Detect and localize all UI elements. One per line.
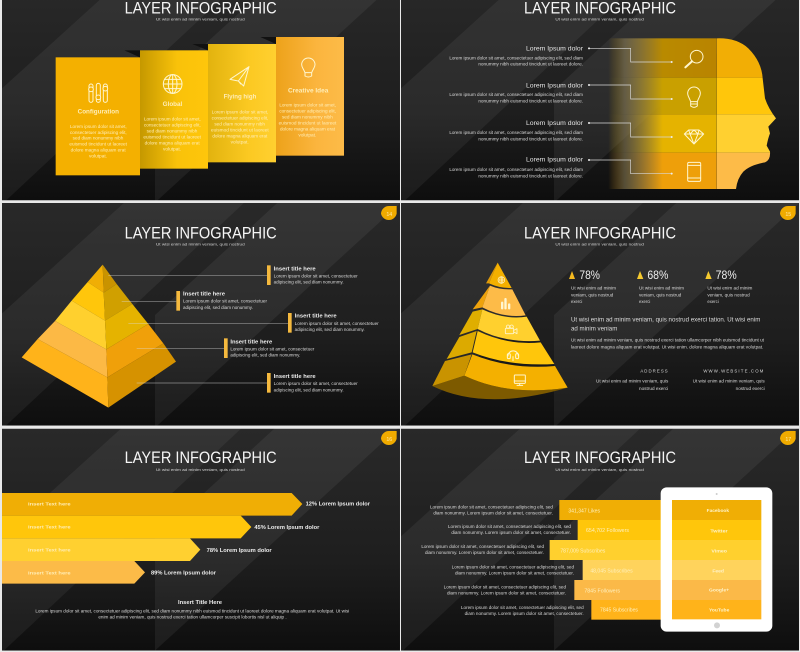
panel text: dolore magna aliquam erat bbox=[212, 133, 268, 138]
stat row: subscribes: diam nonummy. Lorem ipsum dolor sit amet, consectetuer. bbox=[425, 550, 544, 555]
curved layered pyramid bbox=[432, 263, 568, 399]
head graphic bbox=[608, 37, 780, 189]
stat 78%: Ut wisi enim ad minim bbox=[571, 285, 616, 290]
summary heading: ad minim veniam bbox=[571, 326, 617, 332]
website block: nostrud exerci bbox=[736, 386, 765, 391]
callout 1: Insert title here bbox=[274, 266, 316, 272]
tablet labels: Feed bbox=[712, 568, 724, 574]
address block bbox=[596, 368, 668, 391]
item 3: Lorem ipsum dolor sit amet, consectetuer adipiscing elit, sed diam bbox=[449, 130, 583, 135]
arrow bar 4 bbox=[2, 561, 217, 584]
slide 4 title: LAYER INFOGRAPHIC bbox=[524, 223, 676, 242]
panel text: dolore magna aliquam erat bbox=[145, 140, 200, 145]
panel heading: Configuration bbox=[78, 109, 119, 116]
slide 6 subtitle: Ut wisi enim ad minim veniam, quis nostrud bbox=[555, 467, 644, 472]
item 3: Lorem Ipsum dolor bbox=[526, 120, 583, 127]
summary body: laoreet dolore magna aliquam erat volutpat. Ut wisi enim. dolore magna aliquam erat volutpat. bbox=[571, 345, 763, 350]
icon: camera bbox=[505, 325, 517, 334]
icon: light bulb bbox=[302, 58, 315, 77]
arrow bar 2 bbox=[2, 516, 320, 538]
panel heading: Global bbox=[163, 101, 182, 108]
stat row: subscribes 3: diam nonummy. Lorem ipsum dolor sit amet, consectetuer. bbox=[465, 611, 584, 616]
stat row: followers bbox=[448, 520, 663, 540]
page badge 14: 14 bbox=[386, 212, 392, 218]
address block: ADDRESS bbox=[640, 368, 668, 373]
page badge 17: 17 bbox=[785, 437, 791, 443]
stat row: followers 2 bbox=[444, 580, 663, 600]
address block: nostrud exerci bbox=[639, 386, 668, 391]
arrow bar 4: 89% Lorem Ipsum dolor bbox=[151, 571, 217, 577]
icon: globe bbox=[163, 75, 182, 93]
stat 78% second: exerci bbox=[707, 299, 719, 304]
website block bbox=[693, 368, 765, 391]
footer text: Lorem ipsum dolor sit amet, consectetuer adipiscing elit, sed diam nonummy nibh euismod tincidunt ut laoreet dolore magna aliquam erat volutpat. Ut wisi bbox=[35, 608, 349, 613]
stat row: followers: Lorem ipsum dolor sit amet, consectetuer adipiscing elit, sed bbox=[448, 524, 572, 529]
item 3 bbox=[449, 120, 673, 141]
callout 4: adipiscing elit, sed diam nonummy. bbox=[230, 353, 300, 358]
panel text: consectetuer adipiscing elit, bbox=[279, 109, 336, 114]
summary heading: Ut wisi enim ad minim veniam, quis nostrud exerci tation. Ut wisi enim bbox=[571, 317, 760, 323]
arrow bar 3 bbox=[2, 538, 273, 561]
slide 6 background bbox=[401, 425, 800, 652]
item 2: Lorem ipsum dolor sit amet, consectetuer adipiscing elit, sed diam bbox=[449, 92, 583, 97]
panel text: volutpat. bbox=[231, 139, 249, 144]
panel text: Lorem ipsum dolor sit amet, bbox=[144, 117, 201, 122]
callout 3: Insert title here bbox=[295, 314, 337, 320]
stat row: likes bbox=[430, 500, 663, 520]
stat 78%: veniam, quis nostrud bbox=[571, 292, 614, 297]
callout 1: adipiscing elit, sed diam nonummy. bbox=[274, 279, 344, 284]
panel text bbox=[211, 110, 269, 144]
website block: WWW.WEBSITE.COM bbox=[703, 368, 764, 373]
website block: Ut wisi enim ad minim veniam, quis bbox=[693, 379, 765, 384]
panel heading: Creative Idea bbox=[288, 87, 329, 94]
panel: configuration bbox=[56, 57, 140, 175]
arrow bar 3: Insert Text here bbox=[28, 547, 71, 553]
arrow bar 1 bbox=[2, 493, 371, 516]
stat 78%: exerci bbox=[571, 299, 582, 304]
footer text: Insert Title Here bbox=[178, 600, 222, 606]
address block: Ut wisi enim ad minim veniam, quis bbox=[596, 379, 668, 384]
stat row: likes: 341,347 Likes bbox=[568, 508, 600, 514]
slide 3 background bbox=[2, 202, 402, 429]
panel: global bbox=[124, 50, 208, 169]
stat row: subscribes 2: Lorem ipsum dolor sit amet, consectetuer adipiscing elit, sed bbox=[452, 565, 575, 570]
panel text: consectetuer adipiscing elit, bbox=[70, 130, 127, 135]
item 1 bbox=[449, 46, 673, 67]
icon: paper plane bbox=[230, 67, 249, 86]
panel text: euismod tincidunt ut laoreet bbox=[279, 120, 337, 125]
slide 1 background bbox=[2, 0, 402, 204]
page badge 16: 16 bbox=[386, 437, 392, 443]
icon: sliders bbox=[89, 83, 108, 102]
slide 4 background bbox=[401, 202, 800, 429]
slide 6 title: LAYER INFOGRAPHIC bbox=[524, 448, 676, 467]
callout 4: Insert title here bbox=[230, 339, 272, 345]
stat 78%: 78% bbox=[579, 268, 600, 282]
item 4 bbox=[449, 157, 673, 178]
panel text: euismod tincidunt ut laoreet bbox=[211, 127, 269, 132]
panel text: sed diam nonummy nibh bbox=[73, 136, 124, 141]
callout 3: adipiscing elit, sed diam nonummy. bbox=[295, 327, 365, 332]
stat row: subscribes 3: 7845 Subscribes bbox=[600, 608, 638, 614]
summary body bbox=[571, 338, 765, 350]
stat 78% second: Ut wisi enim ad minim bbox=[707, 285, 753, 290]
tablet labels: Google+ bbox=[709, 588, 729, 594]
icon: globe small bbox=[498, 277, 505, 283]
stat row: subscribes 3: Lorem ipsum dolor sit amet, consectetuer adipiscing elit, sed bbox=[461, 605, 584, 610]
arrow bar 1: Insert Text here bbox=[28, 502, 71, 508]
footer text bbox=[35, 600, 349, 619]
slide 5: arrows bbox=[2, 425, 402, 652]
panel text: Lorem ipsum dolor sit amet, bbox=[212, 110, 268, 115]
tablet labels bbox=[707, 508, 730, 614]
slide 4 subtitle: Ut wisi enim ad minim veniam, quis nostrud bbox=[555, 242, 644, 247]
panel text bbox=[69, 124, 128, 159]
panel text: consectetuer adipiscing elit, bbox=[212, 116, 268, 121]
slide 2 subtitle: Ut wisi enim ad minim veniam, quis nostrud bbox=[555, 17, 644, 22]
stat 68% bbox=[637, 268, 684, 304]
slide 5 title: LAYER INFOGRAPHIC bbox=[125, 448, 277, 467]
item 1: Lorem ipsum dolor sit amet, consectetuer adipiscing elit, sed diam bbox=[449, 55, 583, 60]
icon: magnifier bbox=[685, 50, 703, 67]
stat row: subscribes 2: 48,045 Subscribes bbox=[590, 568, 633, 574]
item 1: Lorem Ipsum dolor bbox=[526, 46, 583, 53]
stat 78% second: veniam, quis nostrud bbox=[707, 292, 750, 297]
panel: creative idea bbox=[260, 37, 344, 156]
stat 68%: veniam, quis nostrud bbox=[639, 292, 682, 297]
item 3: nonummy nibh euismod tincidunt ut laoreet dolore. bbox=[478, 136, 583, 141]
stat row: followers: diam nonummy. Lorem ipsum dolor sit amet, consectetuer. bbox=[451, 530, 571, 535]
callout 3: Lorem ipsum dolor sit amet, consectetuer bbox=[295, 321, 379, 326]
panel text: Lorem ipsum dolor sit amet, bbox=[70, 124, 127, 129]
callout 2: Lorem ipsum dolor sit amet, consectetuer bbox=[183, 299, 268, 304]
panel text: volutpat. bbox=[163, 146, 181, 151]
tablet bbox=[661, 487, 772, 632]
page badge 15 bbox=[780, 206, 796, 220]
stat 78% second: 78% bbox=[716, 268, 737, 282]
page badge 17 bbox=[780, 431, 796, 445]
callout 5: adipiscing elit, sed diam nonummy. bbox=[274, 387, 344, 392]
arrow bar 1: 12% Lorem Ipsum dolor bbox=[306, 502, 371, 508]
callout 1 bbox=[108, 265, 358, 285]
panel: flying high bbox=[192, 44, 276, 162]
stat row: likes: Lorem ipsum dolor sit amet, consectetuer adipiscing elit, sed bbox=[430, 505, 554, 510]
item 4: Lorem Ipsum dolor bbox=[526, 157, 583, 164]
stat row: followers 2: Lorem ipsum dolor sit amet, consectetuer adipiscing elit, sed bbox=[444, 584, 567, 589]
panel text: sed diam nonummy nibh bbox=[214, 121, 266, 126]
tablet labels: Vimeo bbox=[711, 548, 727, 554]
callout 3 bbox=[128, 313, 379, 333]
summary heading bbox=[571, 317, 760, 332]
item 4: Lorem ipsum dolor sit amet, consectetuer adipiscing elit, sed diam bbox=[449, 167, 583, 172]
stat row: subscribes 2 bbox=[452, 560, 663, 580]
callout 2 bbox=[122, 291, 268, 311]
stat row: followers 2: 7845 Followers bbox=[584, 589, 620, 595]
callout 4: Lorem ipsum dolor sit amet, consectetuer bbox=[230, 346, 315, 351]
page badge 15: 15 bbox=[785, 212, 791, 218]
stat 78% second bbox=[705, 268, 753, 304]
stat row: subscribes bbox=[421, 540, 663, 560]
icon: tablet bbox=[688, 162, 701, 181]
slide 6: tablet and social stats bbox=[401, 425, 800, 652]
callout 2: adipiscing elit, sed diam nonummy. bbox=[183, 305, 253, 310]
tablet labels: Facebook bbox=[707, 508, 729, 514]
callout 5 bbox=[137, 373, 358, 393]
stat row: followers: 654,702 Followers bbox=[586, 528, 629, 534]
panel text: Lorem ipsum dolor sit amet, bbox=[279, 103, 336, 108]
panel text: sed diam nonummy nibh bbox=[282, 114, 333, 119]
slide 2: head layers bbox=[401, 0, 800, 204]
slide 4: curved pyramid and stats bbox=[401, 202, 800, 429]
panel heading: Flying high bbox=[224, 93, 256, 100]
stat row: subscribes: Lorem ipsum dolor sit amet, consectetuer adipiscing elit, sed bbox=[421, 544, 545, 549]
stat row: subscribes 2: diam nonummy. Lorem ipsum dolor sit amet, consectetuer. bbox=[455, 571, 574, 576]
panel text: volutpat. bbox=[89, 154, 107, 159]
icon: diamond bbox=[684, 130, 704, 144]
item 1: nonummy nibh euismod tincidunt ut laoreet dolore. bbox=[478, 62, 583, 67]
stat row: likes: diam nonummy. Lorem ipsum dolor sit amet, consectetuer. bbox=[433, 511, 553, 516]
callout 5: Insert title here bbox=[274, 374, 316, 380]
slide 3 subtitle: Ut wisi enim ad minim veniam, quis nostrud bbox=[156, 242, 245, 247]
arrow bar 4: Insert Text here bbox=[28, 570, 71, 576]
arrow bar 2: Insert Text here bbox=[28, 525, 71, 531]
panel text: consectetuer adipiscing elit, bbox=[144, 123, 201, 128]
callout 1: Lorem ipsum dolor sit amet, consectetuer bbox=[274, 273, 358, 278]
panel text: volutpat. bbox=[298, 132, 316, 137]
summary body: Ut wisi enim ad minim veniam, quis nostrud exerci tation ullamcorper nibh euismod tincidunt ut bbox=[571, 338, 765, 343]
icon: bulb bbox=[688, 87, 700, 107]
page badge 16 bbox=[381, 431, 397, 445]
callout 5: Lorem ipsum dolor sit amet, consectetuer bbox=[274, 381, 358, 386]
panel text: euismod tincidunt ut laoreet bbox=[143, 134, 202, 139]
item 2: Lorem Ipsum dolor bbox=[526, 82, 583, 89]
stat 68%: exerci bbox=[639, 299, 650, 304]
item 4: nonummy nibh euismod tincidunt ut laoreet dolore. bbox=[478, 173, 583, 178]
panel text bbox=[143, 117, 202, 151]
stat 78% bbox=[569, 268, 616, 304]
slide 3 title: LAYER INFOGRAPHIC bbox=[125, 223, 277, 242]
stat 68%: 68% bbox=[647, 268, 669, 282]
layered pyramid bbox=[22, 265, 176, 408]
slide 1: folded panels bbox=[2, 0, 402, 204]
slide 5 subtitle: Ut wisi enim ad minim veniam, quis nostrud bbox=[156, 467, 245, 472]
item 2 bbox=[449, 82, 673, 103]
stat row: followers 2: diam nonummy. Lorem ipsum dolor sit amet, consectetuer. bbox=[447, 590, 566, 595]
arrow bar 3: 78% Lorem Ipsum dolor bbox=[207, 548, 273, 554]
tablet labels: YouTube bbox=[709, 608, 730, 614]
panel text: euismod tincidunt ut laoreet bbox=[69, 142, 128, 147]
panel text: sed diam nonummy nibh bbox=[147, 128, 198, 133]
slide 5 background bbox=[2, 425, 402, 652]
callout 2: Insert title here bbox=[183, 292, 225, 298]
slide 2 background bbox=[401, 0, 800, 204]
panel text bbox=[279, 103, 337, 137]
icon: bars bbox=[501, 298, 510, 309]
footer text: enim ad minim veniam, quis nostrud exerci tation ullamcorper suscipit lobortis nisl ut aliquip . bbox=[98, 614, 287, 619]
arrow bar 2: 45% Lorem Ipsum dolor bbox=[254, 525, 320, 531]
icon: headphones bbox=[507, 351, 519, 361]
item 2: nonummy nibh euismod tincidunt ut laoreet dolore. bbox=[478, 98, 583, 103]
stat row: subscribes: 787,009 Subscribes bbox=[560, 548, 606, 554]
slide 1 subtitle: Ut wisi enim ad minim veniam, quis nostrud bbox=[156, 17, 245, 22]
panel text: dolore magna aliquam erat bbox=[280, 126, 336, 131]
icon: monitor bbox=[514, 375, 525, 385]
page badge 14 bbox=[381, 206, 397, 220]
slide 3: pyramid bbox=[2, 202, 402, 429]
panel text: dolore magna aliquam erat bbox=[71, 148, 126, 153]
stat row: subscribes 3 bbox=[461, 600, 663, 620]
tablet labels: Twitter bbox=[710, 528, 728, 534]
callout 4 bbox=[137, 338, 315, 358]
stat 68%: Ut wisi enim ad minim bbox=[639, 285, 684, 290]
